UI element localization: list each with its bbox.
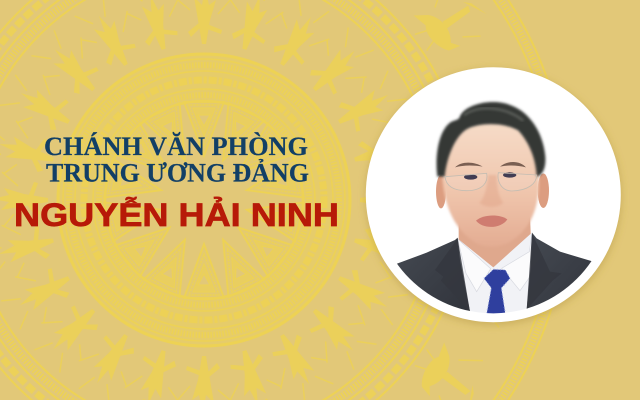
drum inner rings (58, 54, 350, 346)
portrait shadow (366, 69, 622, 325)
title: position (44, 132, 309, 188)
nose (480, 174, 502, 206)
eyes (464, 174, 477, 180)
suit (397, 238, 470, 311)
drum star points (104, 102, 304, 298)
glasses (445, 173, 537, 191)
face (442, 122, 539, 247)
mouth (476, 215, 507, 227)
lapels (454, 234, 554, 311)
eyebrows (455, 162, 526, 167)
portrait white disc (366, 67, 621, 322)
drum bird band (366, 0, 621, 400)
neck (459, 217, 531, 268)
portrait figure (393, 102, 600, 320)
title: position: TRUNG ƯƠNG ĐẢNG (46, 158, 309, 188)
title: position: CHÁNH VĂN PHÒNG (44, 132, 308, 161)
portrait (366, 67, 621, 322)
tie (484, 269, 510, 314)
title: name: NGUYỄN HẢI NINH (14, 196, 339, 233)
collar (458, 233, 532, 292)
shirt (458, 234, 532, 313)
drum figure band (0, 0, 430, 400)
ears (436, 175, 446, 208)
hair (437, 102, 545, 177)
